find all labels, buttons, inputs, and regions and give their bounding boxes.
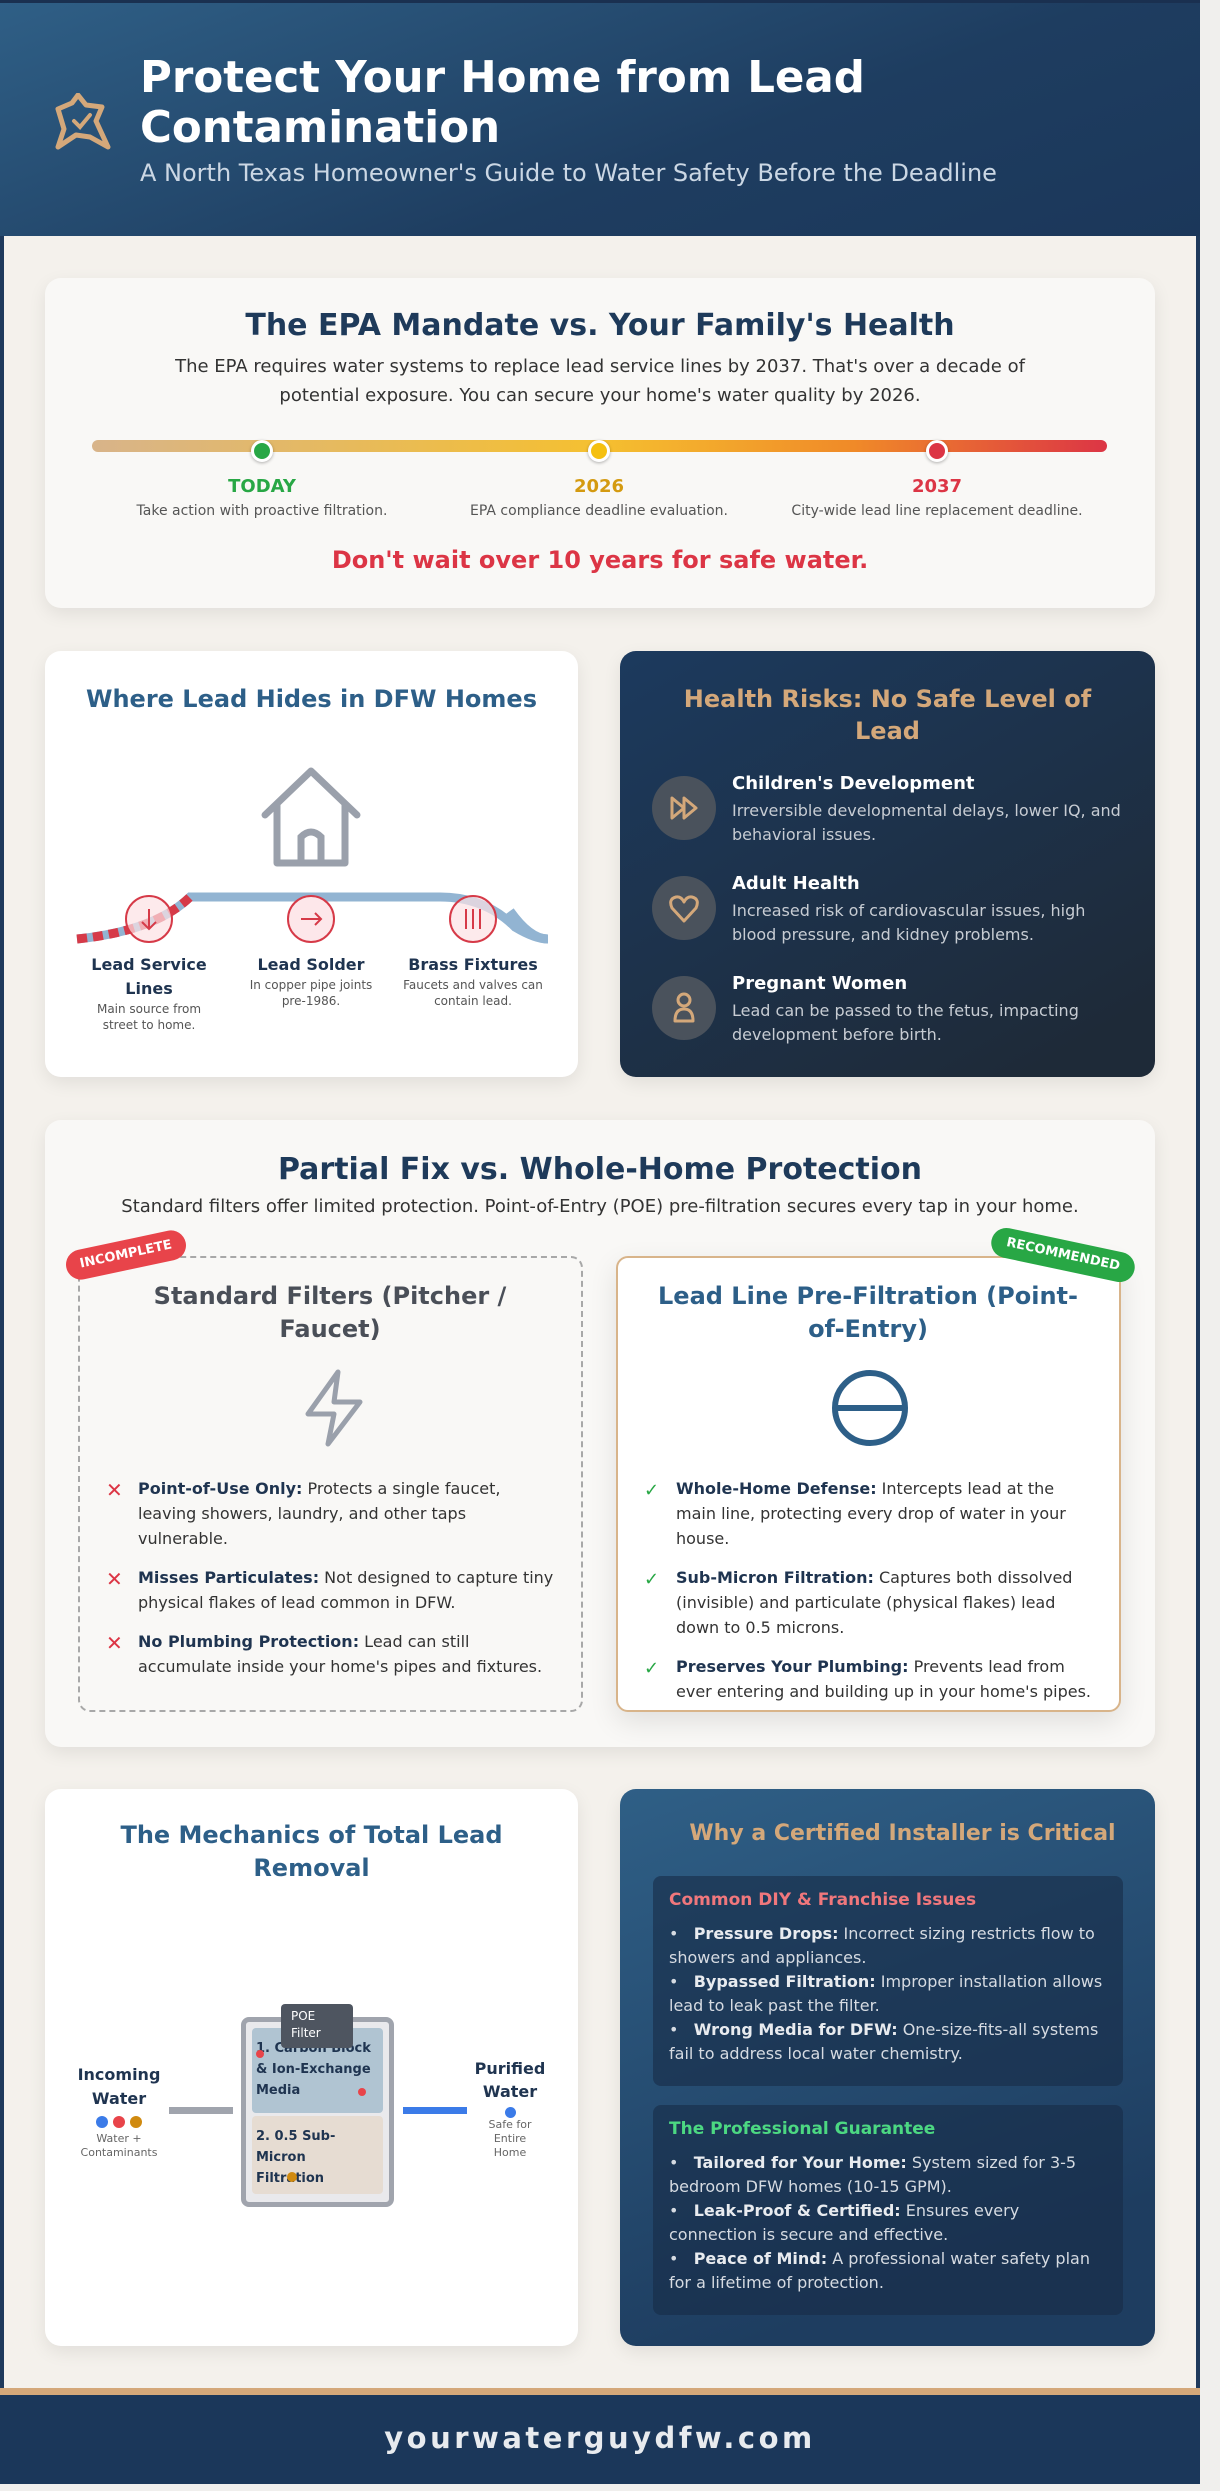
item: pregnant women (652, 973, 1079, 1044)
timeline bar (92, 440, 1107, 452)
diagram: POE filter: Micron (256, 2150, 306, 2165)
heading: Health Risks: No Safe Level of Lead (684, 685, 1091, 745)
diagram: POE filter: 2. 0.5 Sub- (256, 2129, 335, 2144)
bullet list: Point-of-Use Only: Protects a single faucet, leaving showers, laundry, and other taps vulnerable. (138, 1479, 500, 1548)
bullet list: ✓ (644, 1658, 659, 1679)
title (140, 53, 865, 153)
diagram: POE filter: 1. Carbon Block & Ion-Exchange Media (256, 2041, 371, 2098)
panel: partial fix vs whole-home (45, 1120, 1155, 1747)
badge: recommended: RECOMMENDED (1005, 1235, 1121, 1274)
box: professional guarantee: • Tailored for Your Home: System sized for 3-5 bedroom DFW homes (10-15 GPM). (669, 2153, 1076, 2196)
label: brass fixtures: Brass Fixtures (408, 955, 538, 974)
panel: POE pre-filtration (616, 1256, 1121, 1712)
timeline: 2037: 2037 (912, 476, 962, 497)
bullet list: ✕ (106, 1478, 123, 1502)
icon: filter circle (832, 1370, 908, 1446)
diagram: purified water: Entire (494, 2132, 526, 2145)
panel: standard filters (78, 1256, 583, 1712)
diagram: incoming water: Contaminants (81, 2146, 157, 2159)
bullet list: Preserves Your Plumbing: Prevents lead from ever entering and building up in your home's pipes. (676, 1657, 1091, 1701)
timeline: today (136, 439, 387, 519)
title: Protect Your Home from Lead (140, 53, 865, 103)
panel: where lead hides (45, 651, 578, 1077)
heading: The EPA Mandate vs. Your Family's Health (245, 308, 955, 343)
bullet list: ✓ (644, 1480, 659, 1501)
tag: POE filter: POE (291, 2009, 315, 2023)
bullet list: Whole-Home Defense: Intercepts lead at the main line, protecting every drop of water in your house. (676, 1479, 1066, 1548)
heading: The Mechanics of Total Lead Removal (120, 1821, 503, 1882)
arrow: in (169, 2107, 233, 2114)
heading: Where Lead Hides in DFW Homes (86, 685, 537, 713)
panel: health risks (620, 651, 1155, 1077)
tag: POE filter: Filter (291, 2026, 321, 2040)
subtitle: A North Texas Homeowner's Guide to Water Safety Before the Deadline (140, 159, 997, 187)
pipe diagram (76, 892, 548, 944)
diagram: purified water (475, 2059, 545, 2159)
box: professional guarantee (653, 2105, 1123, 2315)
item: pregnant women: Pregnant Women (732, 973, 907, 994)
label: lead service lines: Lead Service Lines (91, 955, 207, 998)
timeline: 2026 (470, 439, 728, 519)
icon: lightning (306, 1370, 362, 1446)
diagram: POE filter (241, 2017, 394, 2207)
label: lead solder (250, 955, 372, 1008)
panel: certified installer (620, 1789, 1155, 2346)
box: professional guarantee: • Leak-Proof & Certified: Ensures every connection is secure and effective. (669, 2201, 1019, 2244)
diagram: purified water: Safe for (488, 2118, 532, 2131)
icon: shield check (55, 93, 110, 150)
diagram: POE filter: Filtration (256, 2171, 324, 2186)
badge: incomplete: INCOMPLETE (79, 1237, 173, 1272)
label: lead service lines (91, 955, 207, 1032)
footer (0, 2388, 1200, 2484)
item: children: Children's Development (732, 773, 975, 794)
bullet list (644, 1479, 1091, 1701)
box: DIY issues: • Wrong Media for DFW: One-size-fits-all systems fail to address local water chemistry. (669, 2020, 1098, 2063)
label: lead solder: In copper pipe joints pre-1986. (250, 978, 372, 1008)
subtitle: Standard filters offer limited protection. Point-of-Entry (POE) pre-filtration secures every tap in your home. (121, 1196, 1079, 1217)
badge: recommended (988, 1225, 1138, 1285)
box: DIY issues: Common DIY & Franchise Issues (669, 1890, 976, 1910)
diagram: incoming water: Water + (96, 2132, 142, 2145)
label: lead solder: Lead Solder (257, 955, 365, 974)
diagram: incoming water (78, 2065, 160, 2159)
panel: EPA mandate timeline (45, 278, 1155, 608)
heading: Why a Certified Installer is Critical (689, 1821, 1116, 1846)
box: DIY issues: • Pressure Drops: Incorrect sizing restricts flow to showers and appliances. (669, 1924, 1095, 1967)
footer: yourwaterguydfw.com (384, 2421, 816, 2455)
label: brass fixtures (403, 955, 543, 1008)
timeline: today: Take action with proactive filtration. (137, 503, 387, 519)
panel: mechanics (45, 1789, 578, 2346)
callout: Don't wait over 10 years for safe water. (332, 546, 868, 574)
item: adult health: Increased risk of cardiovascular issues, high blood pressure, and kidney problems. (732, 901, 1085, 944)
timeline: today: TODAY (228, 476, 296, 497)
heading: Lead Line Pre-Filtration (Point-of-Entry) (658, 1282, 1078, 1343)
bullet list: Sub-Micron Filtration: Captures both dissolved (invisible) and particulate (physical flakes) lead down to 0.5 microns. (676, 1568, 1072, 1637)
item: children: Irreversible developmental delays, lower IQ, and behavioral issues. (732, 801, 1121, 844)
item: adult health (652, 873, 1085, 944)
bullet list (106, 1478, 553, 1676)
bullet list: ✕ (106, 1631, 123, 1655)
diagram: purified water: Home (494, 2146, 526, 2159)
label: brass fixtures: Faucets and valves can contain lead. (403, 978, 543, 1008)
box: professional guarantee: The Professional Guarantee (669, 2119, 935, 2139)
title: Contamination (140, 103, 500, 153)
diagram: purified water: Purified Water (475, 2059, 545, 2101)
text block: The EPA requires water systems to replace lead service lines by 2037. That's over a decade of potential exposure. You can secure your home's water quality by 2026. (175, 356, 1025, 406)
timeline: 2026: 2026 (574, 476, 624, 497)
item: children (652, 773, 1121, 844)
box: professional guarantee: • Peace of Mind: A professional water safety plan for a lifetime of protection. (669, 2249, 1090, 2292)
bullet list: ✓ (644, 1569, 659, 1590)
item: pregnant women: Lead can be passed to the fetus, impacting development before birth. (732, 1001, 1079, 1044)
timeline: 2026: EPA compliance deadline evaluation. (470, 503, 728, 519)
box: DIY issues (653, 1876, 1123, 2086)
item: adult health: Adult Health (732, 873, 860, 894)
arrow: out (403, 2107, 467, 2114)
diagram: incoming water: Incoming Water (78, 2065, 160, 2108)
header (0, 0, 1200, 236)
box: DIY issues: • Bypassed Filtration: Improper installation allows lead to leak past the filter. (669, 1972, 1102, 2015)
badge: incomplete (63, 1228, 189, 1282)
bullet list: ✕ (106, 1567, 123, 1591)
label: lead service lines: Main source from street to home. (97, 1002, 201, 1032)
bullet list: No Plumbing Protection: Lead can still accumulate inside your home's pipes and fixtures. (138, 1632, 542, 1676)
tag: POE filter (281, 2004, 353, 2048)
heading: Partial Fix vs. Whole-Home Protection (278, 1152, 922, 1187)
timeline: 2037 (791, 439, 1083, 519)
icon: house (262, 768, 360, 866)
bullet list: Misses Particulates: Not designed to capture tiny physical flakes of lead common in DFW. (138, 1568, 553, 1612)
heading: Standard Filters (Pitcher / Faucet) (154, 1282, 506, 1343)
timeline: 2037: City-wide lead line replacement deadline. (791, 503, 1083, 519)
